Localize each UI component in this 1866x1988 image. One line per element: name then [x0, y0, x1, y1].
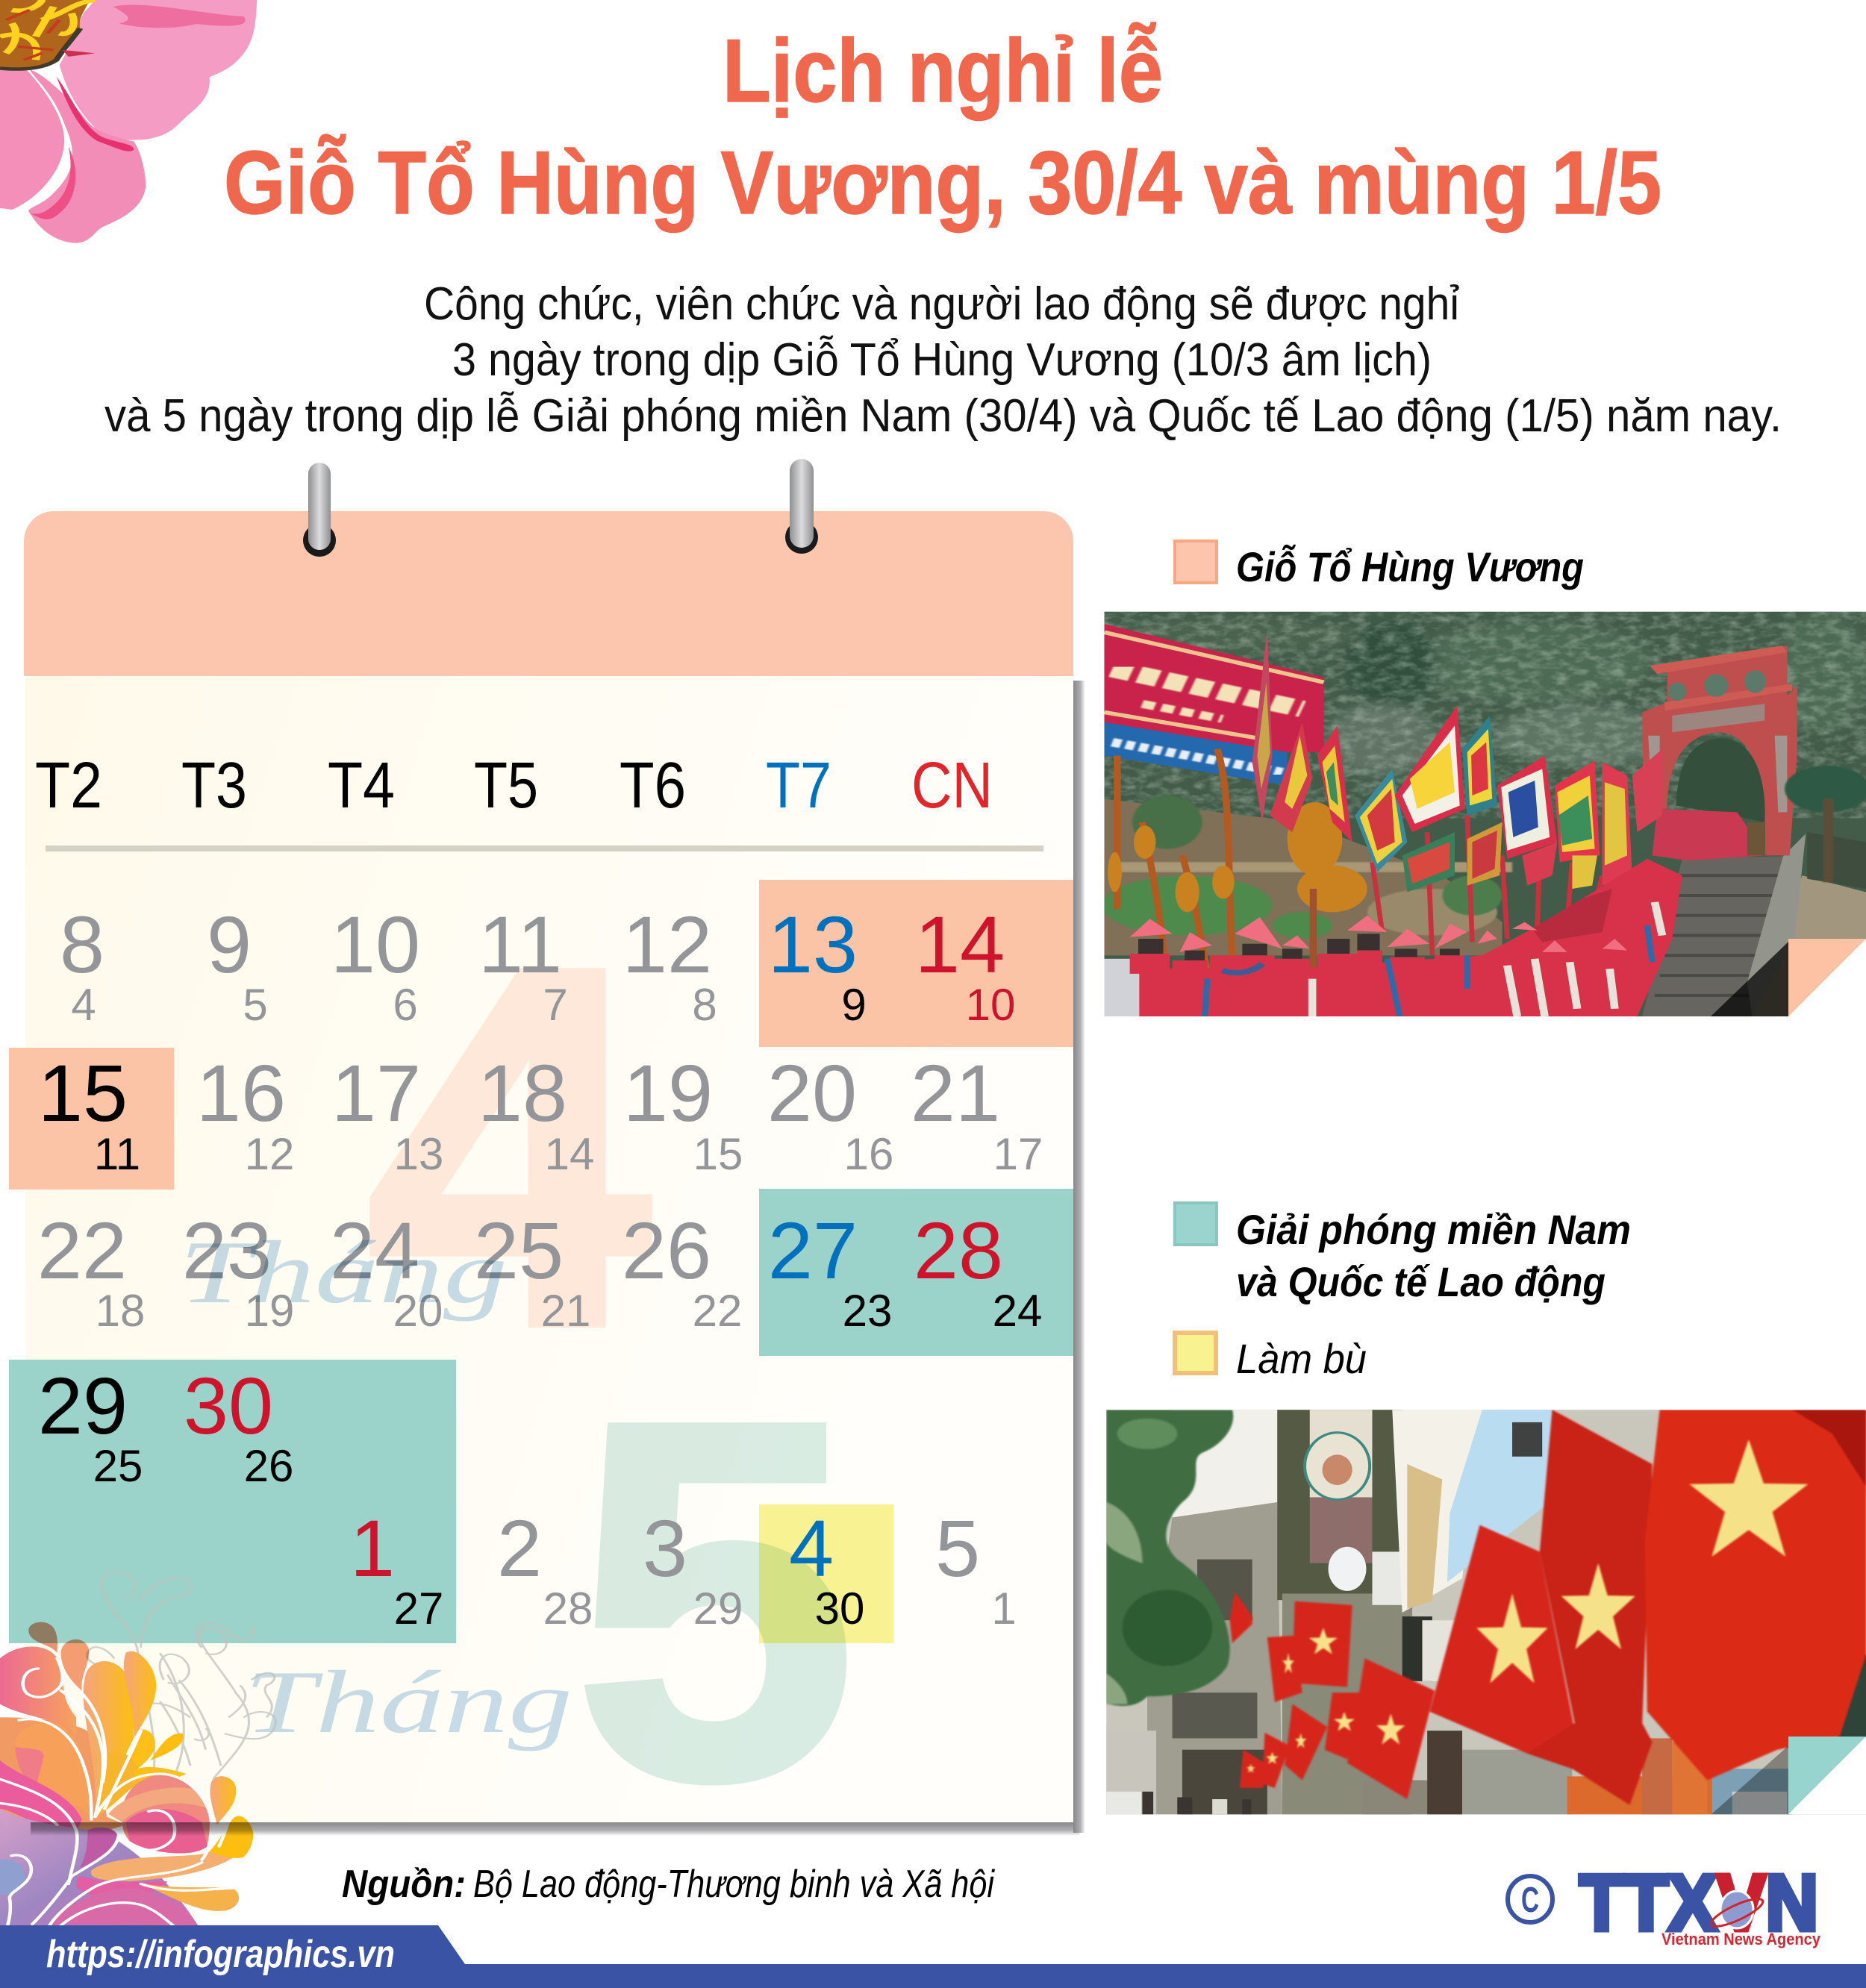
date grid: week 1: 10 [966, 980, 1015, 1030]
intro text block: và 5 ngày trong dịp lễ Giải phóng miền Nam (30/4) và Quốc tế Lao động (1/5) năm nay. [104, 390, 1782, 442]
date grid: week 1: 5 [243, 980, 268, 1030]
date grid: week 2: 16 [844, 1129, 893, 1179]
date grid: week 3: 24 [993, 1286, 1042, 1336]
calendar rings [303, 459, 818, 557]
gate [1642, 646, 1797, 855]
title [224, 21, 1661, 233]
photo: Hung Kings temple procession [1102, 612, 1866, 1016]
date grid: week 3: 28 [914, 1205, 1003, 1295]
date grid: week 3: 22 [37, 1205, 127, 1295]
tree [1106, 1410, 1233, 1706]
legend: Giải phóng miền Nam và Quốc tế Lao động: Giải phóng miền Nam [1236, 1206, 1631, 1253]
date grid: week 4: 29 [693, 1584, 743, 1634]
date grid: week 3: 24 [330, 1205, 419, 1295]
hill [1104, 799, 1503, 955]
legend: Làm bù [1175, 1333, 1367, 1382]
date grid: week 4: 27 [394, 1584, 443, 1634]
date grid: week 3: 19 [245, 1286, 294, 1336]
date grid: week 3: 23 [843, 1286, 892, 1336]
date grid: week 3: 22 [693, 1286, 742, 1336]
date grid: week 4: 30 [184, 1360, 273, 1451]
date grid: week 2: 20 [767, 1048, 857, 1138]
decorative paisley line art [87, 1572, 275, 1787]
date grid: week 1: 9 [841, 980, 867, 1030]
source [342, 1863, 995, 1906]
date grid: week 2: 13 [394, 1129, 443, 1179]
date grid: week 1: 9 [207, 899, 252, 990]
date grid: week 4: 29 [38, 1360, 128, 1451]
date grid: week 3: 23 [182, 1205, 272, 1295]
date grid: week 1: 4 [71, 980, 96, 1030]
date grid: week 1: 14 [915, 899, 1005, 990]
street people [1106, 1792, 1251, 1814]
date grid: week 2: 21 [911, 1048, 1000, 1138]
weekday headers: T5 [474, 749, 538, 822]
date grid: week 4: 2 [497, 1503, 542, 1593]
base filling [0, 1717, 125, 1836]
icon: pink flower top left [0, 0, 257, 243]
date grid: week 3: 21 [541, 1286, 590, 1336]
banner [1104, 624, 1324, 752]
date grid: week 3: 26 [622, 1205, 711, 1295]
title: Lịch nghỉ lễ [723, 21, 1163, 121]
calendar shadow [31, 681, 1085, 1836]
intro text block: Công chức, viên chức và người lao động sẽ được nghỉ [424, 278, 1459, 330]
date grid: week 4: 28 [543, 1584, 593, 1634]
intro text block: 3 ngày trong dịp Giỗ Tổ Hùng Vương (10/3 âm lịch) [452, 334, 1432, 386]
watermark: month 5: 5 [574, 1317, 856, 1884]
stars [1246, 1440, 1808, 1773]
date grid: week 1: 13 [768, 899, 858, 990]
date grid: week 1: 11 [478, 899, 562, 990]
flag poles [1372, 816, 1603, 955]
date grid: week 1: 6 [393, 980, 418, 1030]
website url: https://infographics.vn [46, 1933, 395, 1976]
calendar page [25, 676, 1073, 1822]
date grid: week 4: 26 [244, 1441, 293, 1491]
right slope and stairs [1753, 875, 1866, 1016]
panel: calendar [9, 459, 1073, 1884]
intro text block [104, 278, 1782, 442]
date grid: week 1: 8 [60, 899, 104, 990]
flags [1252, 629, 1662, 893]
logo: TTXVN: TTXVN [1579, 1859, 1818, 1947]
source: Bộ Lao động-Thương binh và Xã hội [473, 1863, 995, 1906]
icon: swirl flower bottom left [0, 1622, 253, 1925]
title: Giỗ Tổ Hùng Vương, 30/4 và mùng 1/5 [224, 133, 1661, 233]
logo: TTXVN: Vietnam News Agency [1661, 1930, 1821, 1948]
watermark: Tháng label for May: Tháng [244, 1652, 572, 1751]
date grid: week 2 [38, 1048, 1043, 1179]
date grid: week 2: 12 [245, 1129, 294, 1179]
weekday headers: T4 [328, 749, 395, 822]
photo: street with national flags [1106, 1410, 1866, 1814]
date grid: week 3: 18 [96, 1286, 145, 1336]
date grid: week 4: 3 [643, 1503, 687, 1593]
date grid: week 2: 11 [94, 1129, 140, 1179]
photo fold corner [1711, 939, 1866, 1016]
date grid: week 3: 20 [393, 1286, 443, 1336]
weekday headers: T7 [766, 749, 831, 822]
weekday headers: T3 [181, 749, 247, 822]
date grid: week 1: 8 [692, 980, 717, 1030]
date grid: week 3: 27 [768, 1205, 858, 1295]
copyright mark [1508, 1876, 1553, 1922]
date grid: week 4: 25 [93, 1441, 143, 1491]
watermark: Tháng label for April: Tháng [179, 1222, 508, 1322]
date grid: week 2: 17 [993, 1129, 1043, 1179]
people at gate [1653, 809, 1767, 860]
highlight: liberation and labour day holiday [9, 1189, 1073, 1643]
date grid: week 4: 4 [789, 1503, 834, 1593]
date grid: week 3: 25 [474, 1205, 564, 1295]
legend: Giải phóng miền Nam và Quốc tế Lao động: và Quốc tế Lao động [1236, 1258, 1606, 1305]
date grid: week 2: 15 [38, 1048, 128, 1138]
flags [1230, 1410, 1866, 1805]
weekday headers: T6 [620, 749, 686, 822]
weekday headers [35, 749, 993, 822]
date grid: week 2: 19 [623, 1048, 713, 1138]
date grid: week 4: 5 [935, 1503, 980, 1593]
date grid: week 2: 17 [331, 1048, 421, 1138]
highlight: make-up work day [759, 1504, 893, 1643]
footer bar [0, 1925, 1866, 1988]
date grid: week 4: 1 [350, 1503, 395, 1593]
legend: Làm bù: Làm bù [1236, 1335, 1367, 1382]
date grid: week 1 [60, 899, 1015, 1030]
date grid: week 4 [38, 1360, 1017, 1634]
date grid: week 1: 12 [622, 899, 712, 990]
procession crowd [1104, 859, 1682, 1016]
copyright mark: C [1521, 1881, 1539, 1920]
date grid: week 3 [37, 1205, 1042, 1336]
date grid: week 4: 30 [815, 1584, 864, 1634]
poles [1117, 749, 1232, 969]
date grid: week 2: 15 [693, 1129, 743, 1179]
weekday headers: CN [911, 749, 993, 822]
calendar header [24, 511, 1073, 676]
date grid: week 1: 7 [543, 980, 568, 1030]
date grid: week 2: 16 [196, 1048, 286, 1138]
date grid: week 4: 1 [991, 1584, 1017, 1634]
ceremonial golden ornaments [1108, 802, 1367, 975]
highlight: Hung Kings holiday [9, 880, 1073, 1190]
date grid: week 1: 10 [331, 899, 420, 990]
source: Nguồn: [342, 1863, 466, 1906]
weekday headers: T2 [35, 749, 102, 822]
buildings [1147, 1502, 1282, 1814]
watermark: month 4: 4 [367, 863, 652, 1431]
date grid: week 2: 14 [545, 1129, 594, 1179]
photo fold corner [1788, 1737, 1866, 1814]
palm [1785, 766, 1866, 882]
date grid: week 2: 18 [478, 1048, 567, 1138]
legend: Giải phóng miền Nam và Quốc tế Lao động [1175, 1203, 1631, 1305]
legend: Giỗ Tổ Hùng Vương: Giỗ Tổ Hùng Vương [1236, 543, 1584, 590]
